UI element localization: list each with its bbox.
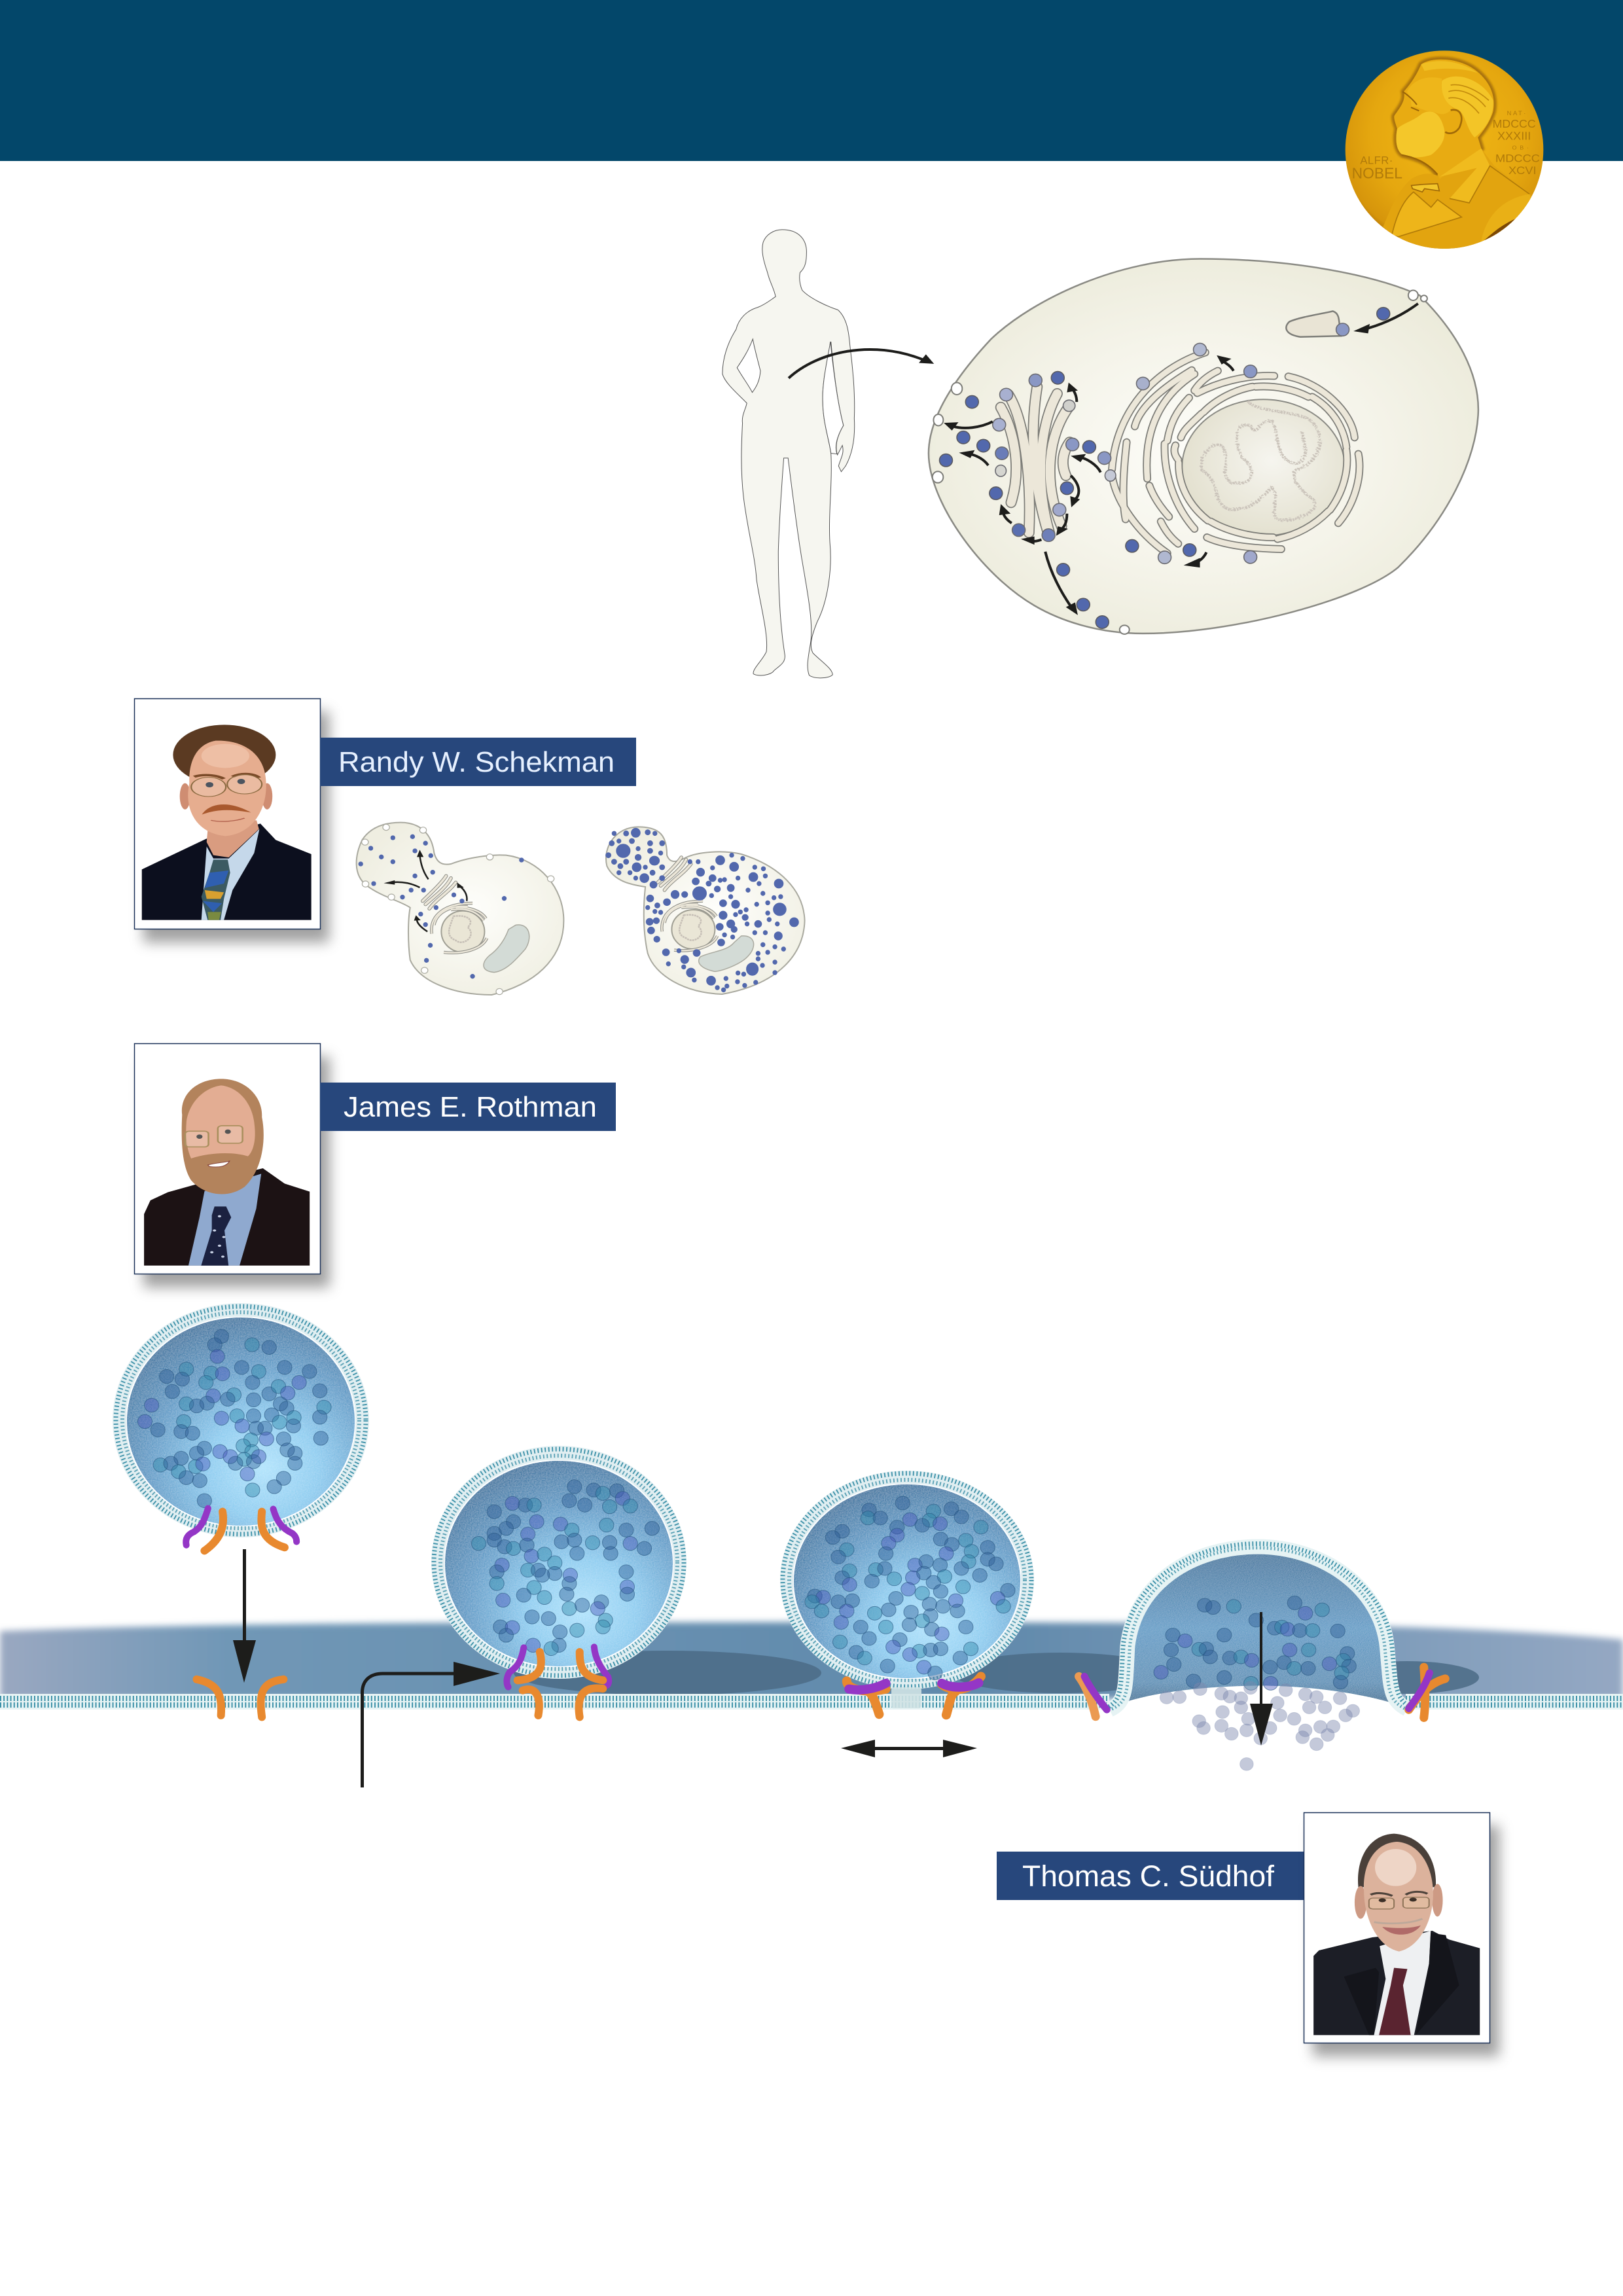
- yeast cell: normal secretion: [357, 823, 563, 995]
- vesicle 2: docked: [434, 1449, 684, 1717]
- header band: [0, 0, 1623, 161]
- accumulated vesicles: [606, 829, 798, 992]
- neurotransmitters: [805, 1496, 1015, 1680]
- medal lettering: MDCCC: [1495, 152, 1540, 164]
- cleft below dome: [1113, 1685, 1400, 1717]
- dome interior: [1115, 1550, 1402, 1706]
- neurotransmitters: [137, 1329, 331, 1508]
- neurotransmitters: [471, 1480, 659, 1656]
- dome membrane: [1106, 1544, 1412, 1710]
- fusion pore dimple: [891, 1687, 921, 1708]
- zippered SNARE complexes: [847, 1676, 981, 1715]
- name tag: James E. Rothman: James E. Rothman: [344, 1091, 597, 1123]
- vesicle 1: approaching: [116, 1306, 366, 1717]
- portrait: Randy W. Schekman: [135, 699, 329, 942]
- medal lettering: XXXIII: [1497, 129, 1531, 142]
- curved transport arrows: [789, 304, 1418, 615]
- human silhouette: [722, 230, 855, 678]
- secretory cell diagram: [789, 259, 1478, 634]
- budding pale vesicles: [993, 323, 1349, 564]
- vesicle shadows: [514, 1651, 1479, 1695]
- medal bust: [1383, 60, 1535, 257]
- medal lettering: MDCCC: [1493, 117, 1536, 130]
- neurotransmitters in dome: [1154, 1596, 1356, 1690]
- vesicle 3: fusing: [783, 1473, 1031, 1715]
- medal lettering: NAT·: [1507, 110, 1525, 117]
- medal lettering: NOBEL: [1352, 165, 1402, 182]
- plasma membrane: [0, 1694, 1623, 1710]
- medal lettering: ALFR·: [1360, 154, 1393, 167]
- vesicle 4: merged dome releasing contents: [1079, 1544, 1445, 1770]
- portrait: James E. Rothman: [135, 1043, 330, 1287]
- exit notches: [362, 824, 554, 995]
- Nobel medal: [1346, 50, 1543, 257]
- arrow: double-headed fusion force: [841, 1740, 977, 1757]
- endoplasmic reticulum: [1112, 352, 1359, 553]
- organelle near surface: [1286, 311, 1341, 337]
- yeast vesicles: [359, 834, 524, 978]
- medal lettering: [1352, 110, 1540, 182]
- name tag: Thomas C. Südhof: [997, 1852, 1304, 1900]
- yeast cell: secretion mutant packed with vesicles: [606, 827, 805, 994]
- medal lettering: OB·: [1512, 145, 1529, 151]
- portrait: Thomas C. Südhof: [1304, 1813, 1499, 2056]
- SNARE proteins on vesicle and membrane: [186, 1509, 296, 1717]
- SNARE complexes docked: [507, 1647, 609, 1717]
- arrow: content release: [1250, 1612, 1273, 1746]
- arrow: vesicle docks down: [233, 1549, 256, 1683]
- cell body: [929, 259, 1478, 634]
- medal lettering: XCVI: [1508, 164, 1537, 177]
- name tag: Randy W. Schekman: [320, 738, 636, 786]
- name tag: Randy W. Schekman: Randy W. Schekman: [338, 746, 615, 778]
- name tag: James E. Rothman: [320, 1083, 616, 1131]
- cell surface layer: [0, 1622, 1623, 1699]
- chromatin: [1200, 399, 1319, 520]
- released neurotransmitters: [1160, 1681, 1359, 1770]
- opened SNARE complexes: [1079, 1667, 1445, 1717]
- free vesicles: [940, 308, 1390, 628]
- yeast arrows: [383, 850, 467, 931]
- Golgi apparatus: [1001, 387, 1070, 533]
- name tag: Thomas C. Südhof: Thomas C. Südhof: [1022, 1859, 1275, 1893]
- fusing vesicles at membrane: [933, 290, 1427, 634]
- nucleus: [1182, 399, 1345, 536]
- arrow: elbow to SNARE complex: [363, 1662, 500, 1787]
